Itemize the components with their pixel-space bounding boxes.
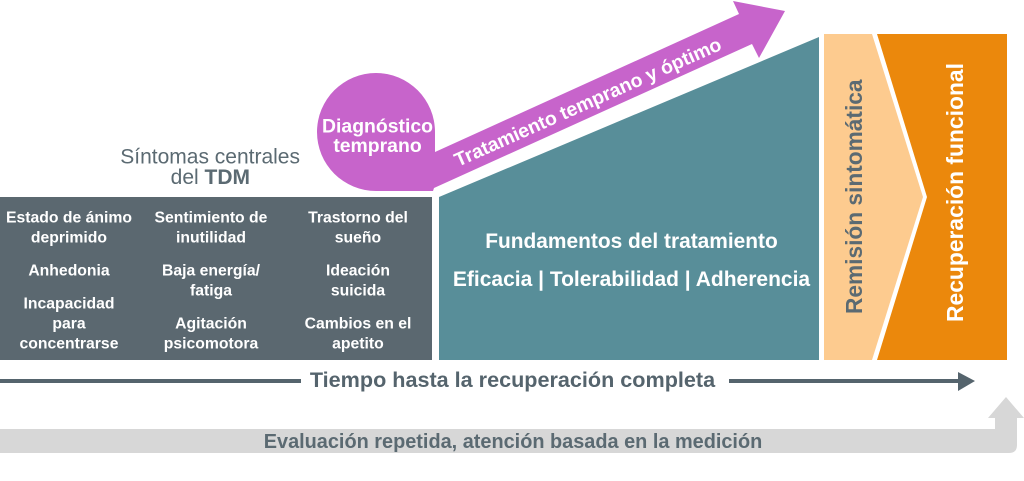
symptoms column 2: fatiga <box>190 282 232 300</box>
symptoms column 3: Ideación <box>326 262 390 280</box>
arrow: time to full recovery: Tiempo hasta la recuperación completa <box>310 367 716 392</box>
symptoms column 2: inutilidad <box>176 230 246 246</box>
symptoms column 1: Anhedonia <box>28 262 110 280</box>
symptoms column 3: Cambios en el <box>305 316 411 332</box>
heading: core symptoms: Síntomas centrales <box>120 146 300 168</box>
panel: treatment foundations: Fundamentos del tratamiento <box>485 230 778 253</box>
panel: symptomatic remission <box>824 34 923 360</box>
symptoms column 1: deprimido <box>31 230 107 246</box>
heading: core symptoms <box>120 146 300 189</box>
early diagnosis bubble and treatment arrow <box>317 1 785 191</box>
symptoms column 1: concentrarse <box>20 336 119 352</box>
symptoms column 2: Sentimiento de <box>155 210 268 226</box>
symptoms column 1: Incapacidad <box>23 296 115 312</box>
panel: core symptoms <box>0 197 432 360</box>
panel: symptomatic remission: Remisión sintomática <box>841 79 867 314</box>
panel: functional recovery: Recuperación funcional <box>942 63 968 322</box>
symptoms column 2 <box>155 210 268 352</box>
panel: functional recovery <box>877 34 1007 360</box>
heading: core symptoms: del TDM <box>171 166 250 189</box>
symptoms column 2: Agitación <box>175 316 247 332</box>
arrow: repeated evaluation: Evaluación repetida, atención basada en la medición <box>264 431 762 453</box>
symptoms column 2: Baja energía/ <box>162 262 261 280</box>
symptoms column 1: para <box>52 316 86 332</box>
label: early and optimal treatment: Tratamiento temprano y óptimo <box>451 34 725 172</box>
symptoms column 3: suicida <box>331 282 385 300</box>
symptoms column 3: sueño <box>335 230 381 246</box>
symptoms column 3 <box>305 210 411 352</box>
panel: treatment foundations <box>439 37 819 360</box>
arrow: time to full recovery <box>0 367 975 392</box>
label: early diagnosis: temprano <box>333 135 422 157</box>
label: early diagnosis <box>322 116 433 157</box>
symptoms column 3: Trastorno del <box>308 210 408 226</box>
symptoms column 1 <box>6 210 132 352</box>
panel: treatment foundations: Eficacia | Tolerabilidad | Adherencia <box>453 268 810 291</box>
symptoms column 1: Estado de ánimo <box>6 210 132 226</box>
symptoms column 2: psicomotora <box>164 336 258 352</box>
arrow: repeated evaluation <box>0 397 1024 453</box>
symptoms column 3: apetito <box>332 336 384 352</box>
label: early diagnosis: Diagnóstico <box>322 116 433 138</box>
